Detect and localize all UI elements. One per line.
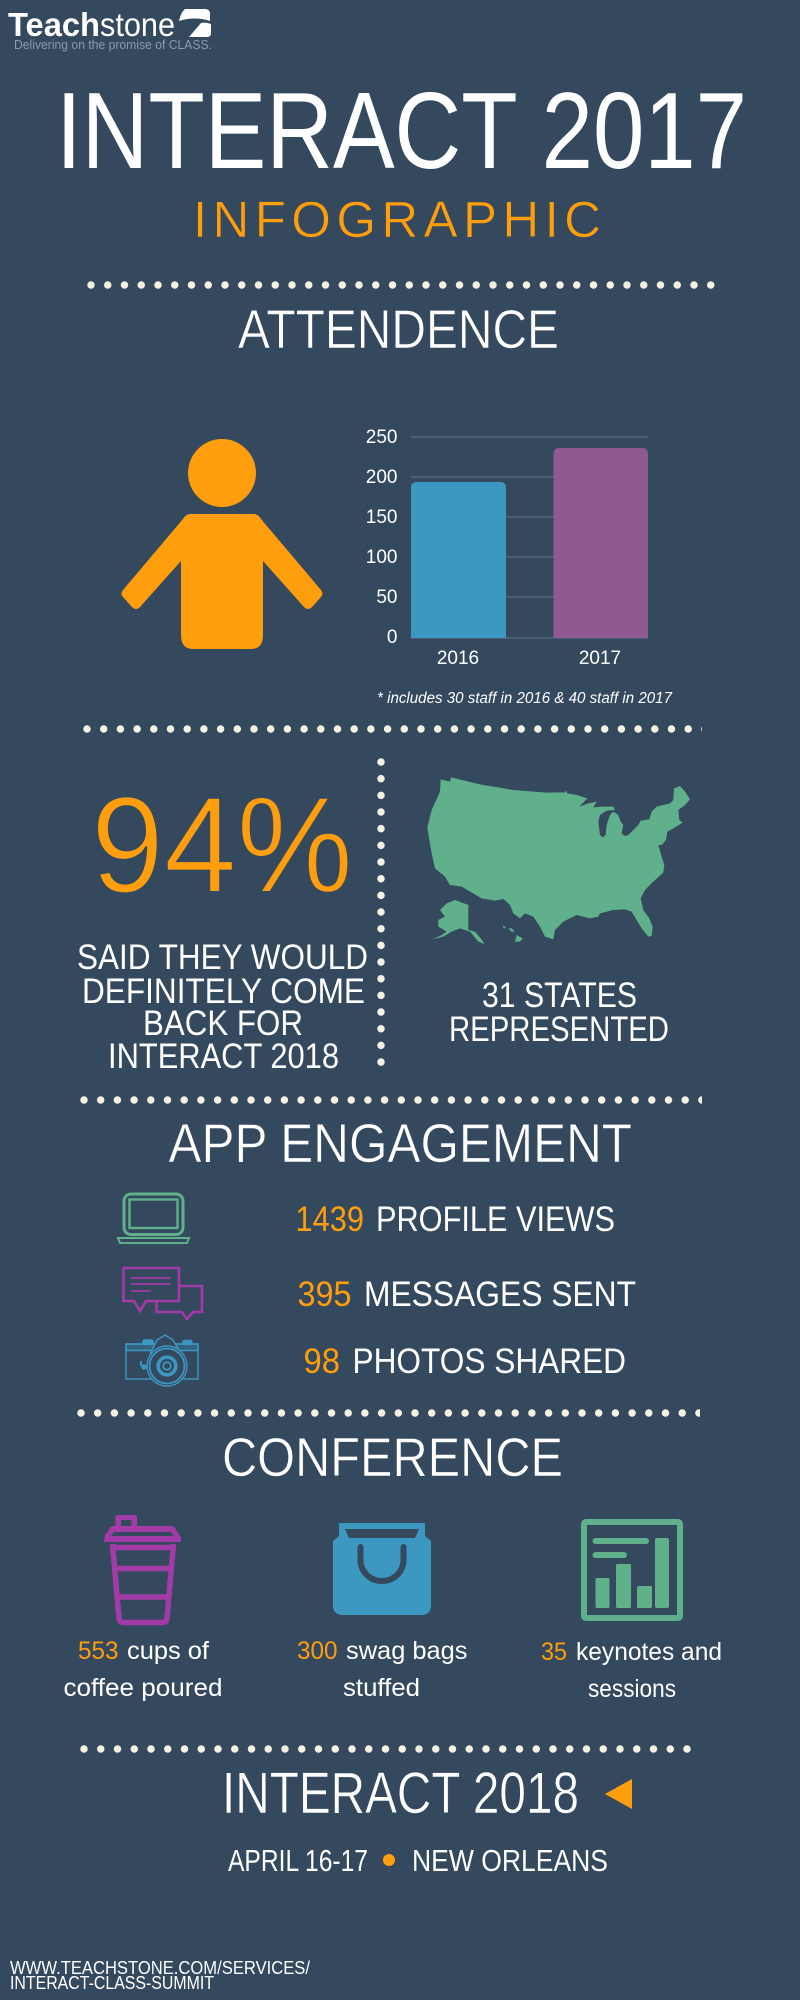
- text: would come back: SAID THEY WOULD: [77, 938, 368, 977]
- text: 300 swag bags stuffed: [297, 1637, 468, 1702]
- axis labels: 50: [376, 587, 398, 608]
- text: 300 swag bags stuffed: stuffed: [343, 1674, 420, 1702]
- axis labels: 100: [366, 547, 398, 568]
- logo: Teachstone: stone: [100, 6, 175, 43]
- icon: laptop: [118, 1194, 189, 1243]
- logo: Teachstone: [8, 6, 212, 52]
- arrow: triangle pointer: [605, 1779, 632, 1809]
- text: 553 cups of coffee poured: coffee poured: [64, 1674, 222, 1702]
- icon: swag bag: [333, 1523, 431, 1615]
- text: event date and location: NEW ORLEANS: [412, 1844, 608, 1878]
- text: 300 swag bags stuffed: 300: [297, 1637, 338, 1665]
- logo: Teachstone: Delivering on the promise of CLASS.: [14, 38, 212, 52]
- logo: Teachstone: Teach: [8, 6, 100, 43]
- text: event date and location: APRIL 16-17: [228, 1844, 368, 1878]
- text: 35 keynotes and sessions: keynotes and: [576, 1638, 722, 1666]
- stat: profile views: 1439: [296, 1200, 364, 1239]
- subtitle: INFOGRAPHIC: [193, 191, 601, 248]
- text: 553 cups of coffee poured: cups of: [127, 1637, 209, 1665]
- text: 35 keynotes and sessions: sessions: [588, 1675, 676, 1703]
- icon: person: [122, 439, 322, 649]
- bar: 2017: [554, 448, 648, 638]
- bar: 2016: [411, 482, 506, 638]
- stat: photos shared: 98: [304, 1342, 340, 1381]
- axis labels: 150: [366, 507, 398, 528]
- stat: messages sent: MESSAGES SENT: [364, 1275, 636, 1314]
- axis labels: 250: [366, 427, 398, 448]
- text: event date and location: [228, 1844, 608, 1878]
- footnote: * includes 30 staff in 2016 & 40 staff in 2017: [377, 690, 673, 707]
- text: 300 swag bags stuffed: swag bags: [346, 1637, 468, 1665]
- heading: attendence: ATTENDENCE: [238, 298, 559, 360]
- stat: profile views: PROFILE VIEWS: [376, 1200, 615, 1239]
- map: United States: [427, 777, 690, 944]
- stat: 94 percent: 94%: [91, 769, 353, 922]
- bar chart: attendance 2016 vs 2017: [366, 427, 648, 669]
- heading: conference: CONFERENCE: [222, 1426, 563, 1488]
- axis labels: [366, 427, 621, 669]
- text: 31 states represented: REPRESENTED: [449, 1010, 669, 1049]
- text: 31 states represented: [449, 976, 669, 1049]
- text: website url: WWW.TEACHSTONE.COM/SERVICES/: [10, 1958, 310, 1978]
- icon: camera: [126, 1335, 198, 1386]
- axis labels: 2017: [579, 648, 621, 669]
- axis labels: 0: [387, 627, 398, 648]
- stat: photos shared: PHOTOS SHARED: [352, 1342, 626, 1381]
- text: 35 keynotes and sessions: [541, 1638, 722, 1703]
- text: would come back: BACK FOR: [143, 1004, 303, 1043]
- text: 35 keynotes and sessions: 35: [541, 1638, 567, 1666]
- text: would come back: [77, 938, 368, 1076]
- axis labels: 200: [366, 467, 398, 488]
- text: 31 states represented: 31 STATES: [482, 976, 637, 1015]
- stat: profile views: [296, 1200, 615, 1239]
- text: would come back: DEFINITELY COME: [82, 972, 365, 1011]
- icon: report chart: [584, 1522, 680, 1618]
- text: website url: [10, 1958, 310, 1993]
- icon: message bubbles: [124, 1268, 202, 1319]
- heading: interact 2018: INTERACT 2018: [222, 1761, 579, 1826]
- text: 553 cups of coffee poured: 553: [78, 1637, 118, 1665]
- heading: app engagement: APP ENGAGEMENT: [168, 1112, 632, 1174]
- text: would come back: INTERACT 2018: [108, 1037, 339, 1076]
- axis labels: 2016: [437, 648, 479, 669]
- stat: messages sent: 395: [298, 1275, 352, 1314]
- text: website url: INTERACT-CLASS-SUMMIT: [10, 1973, 214, 1993]
- text: 553 cups of coffee poured: [64, 1637, 222, 1702]
- icon: coffee cup: [104, 1515, 181, 1622]
